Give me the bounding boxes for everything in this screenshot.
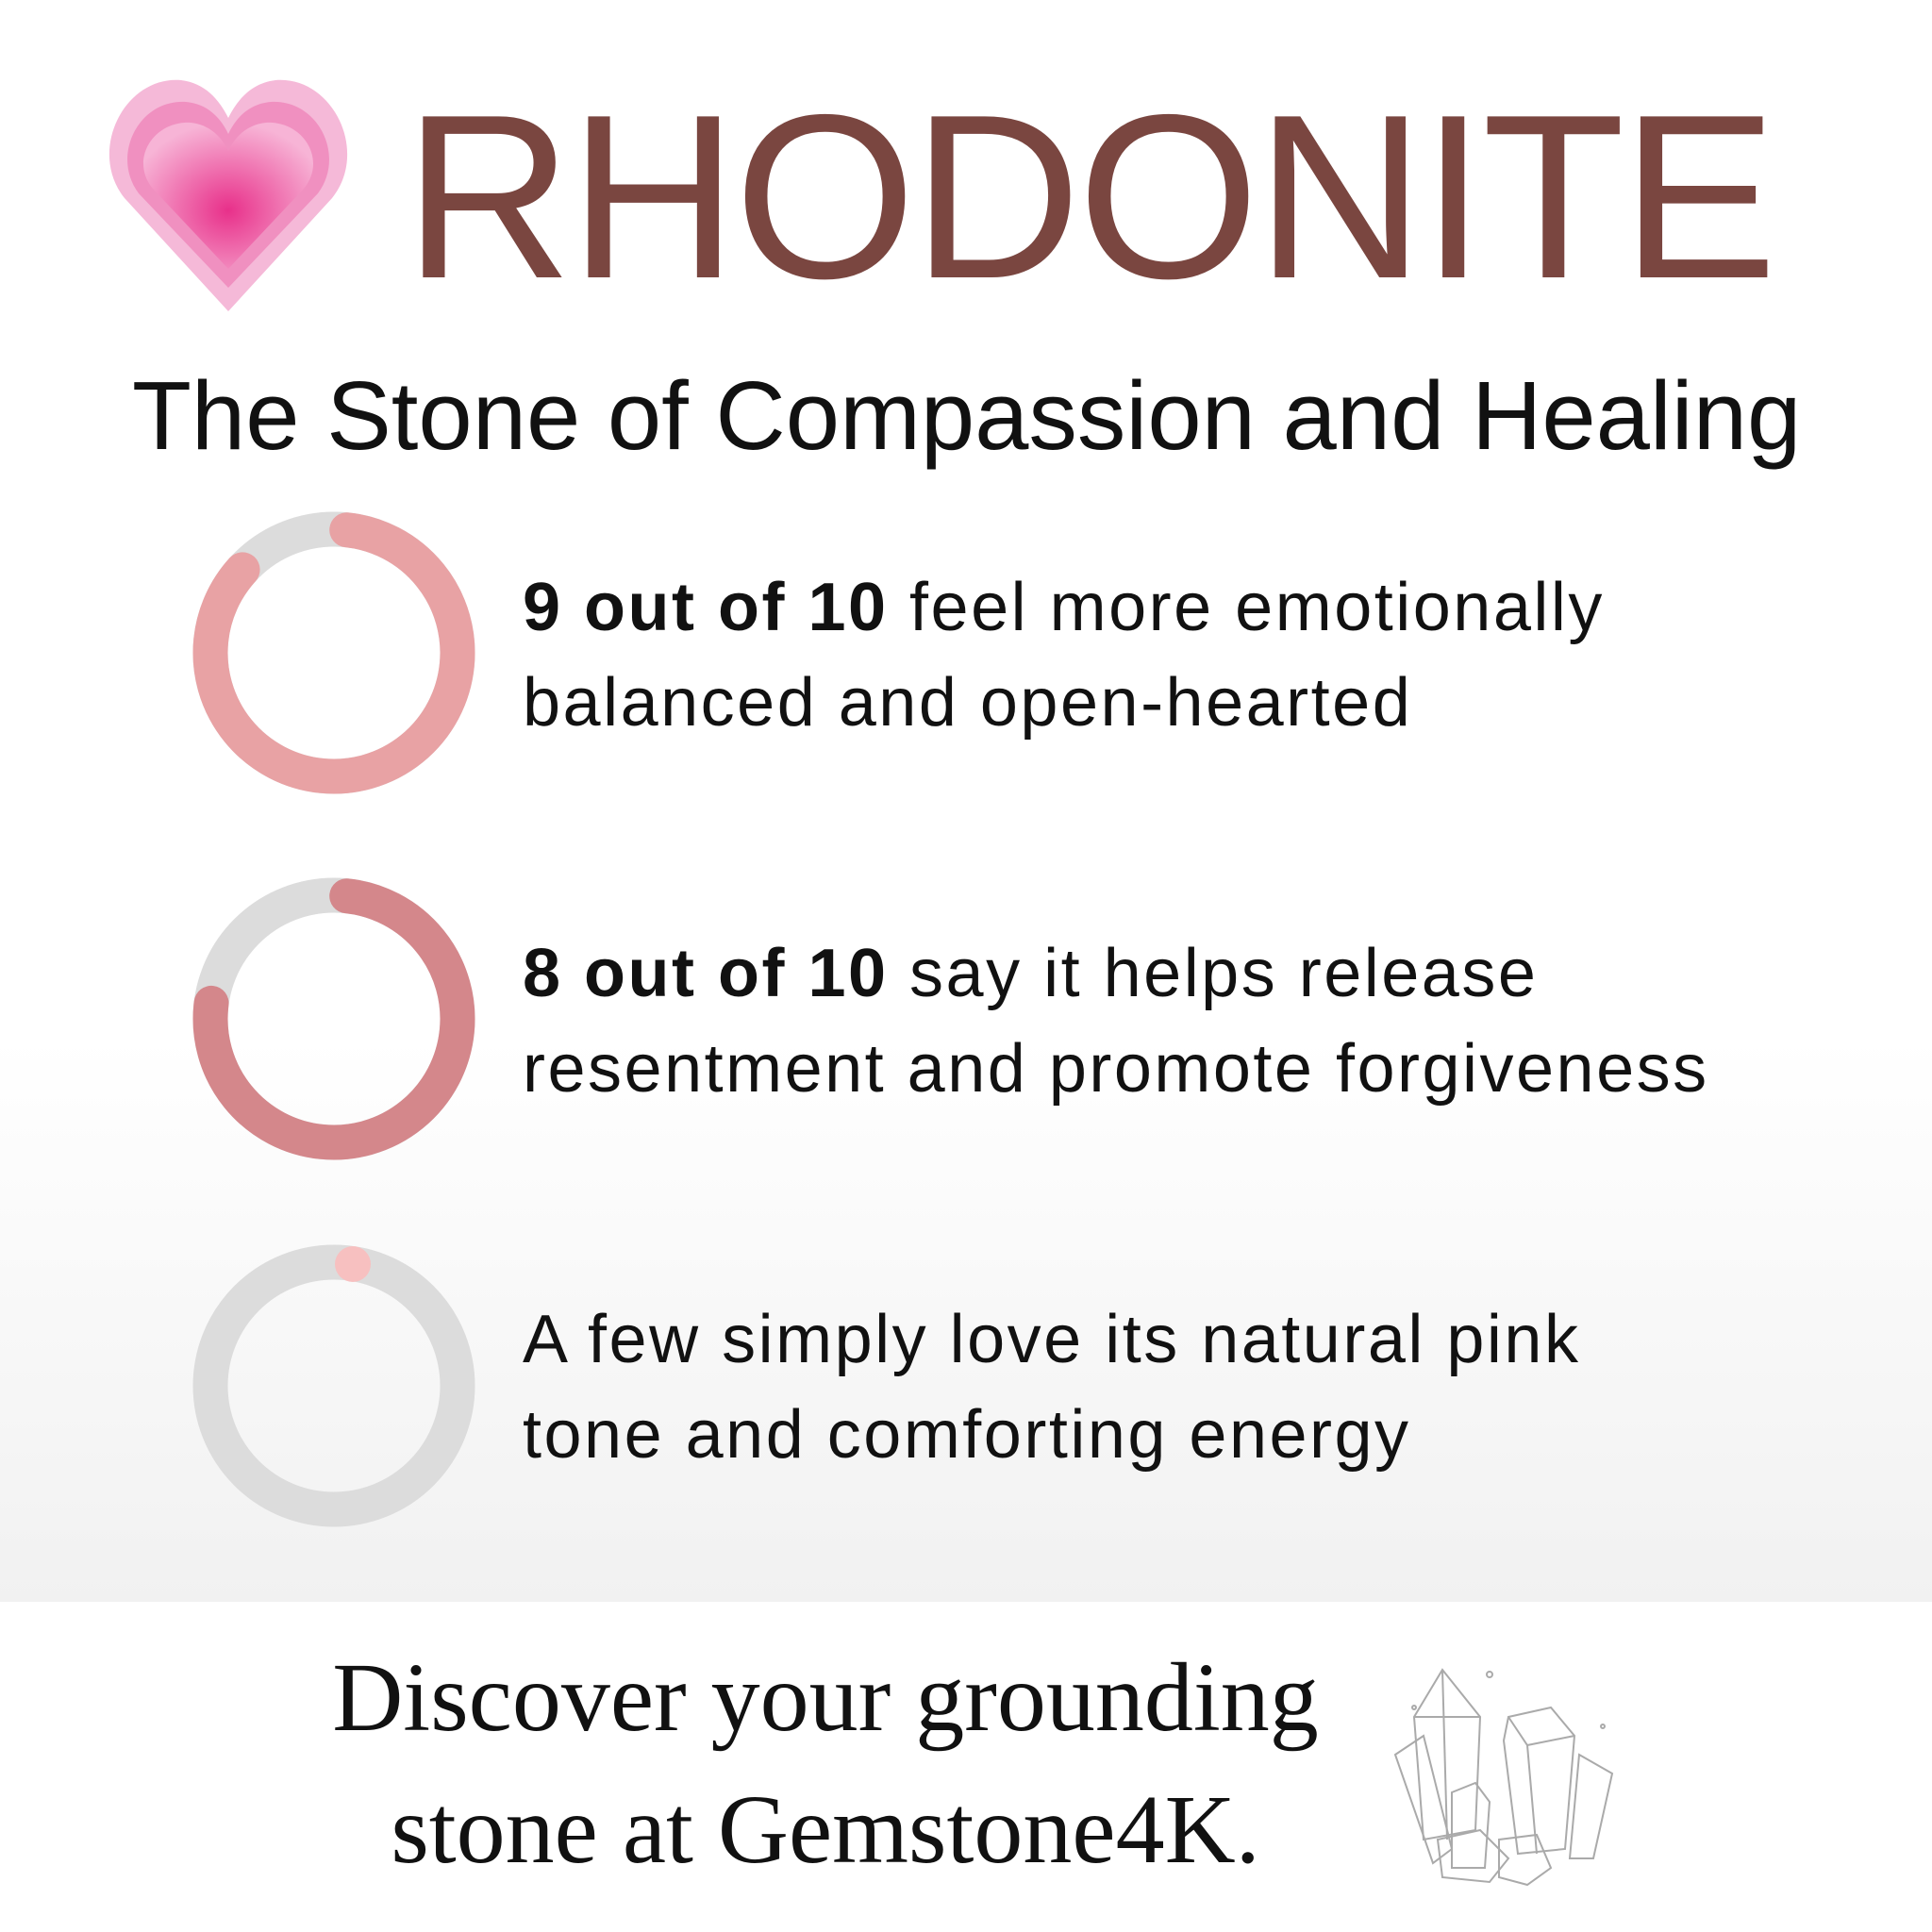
stat text 3: tone and comforting energy bbox=[523, 1397, 1411, 1473]
ring chart: few bbox=[192, 1245, 475, 1526]
stat text 2 bbox=[523, 936, 1709, 1107]
stat text 1 bbox=[523, 570, 1605, 741]
stat text 1: 9 out of 10 feel more emotionally bbox=[523, 570, 1605, 645]
ring chart: 90% bbox=[192, 511, 475, 794]
ring chart: 80% bbox=[192, 877, 475, 1160]
footer text bbox=[332, 1643, 1319, 1884]
icon: heart bbox=[109, 79, 347, 311]
subtitle: The Stone of Compassion and Healing bbox=[132, 361, 1801, 470]
stat text 1: balanced and open-hearted bbox=[523, 665, 1412, 741]
footer text: Discover your grounding bbox=[332, 1643, 1319, 1752]
icon: crystals bbox=[1394, 1668, 1613, 1887]
stat text 3 bbox=[523, 1302, 1580, 1473]
title: RHODONITE bbox=[404, 65, 1774, 327]
stat text 2: resentment and promote forgiveness bbox=[523, 1031, 1709, 1107]
footer text: stone at Gemstone4K. bbox=[391, 1775, 1260, 1884]
stat text 2: 8 out of 10 say it helps release bbox=[523, 936, 1538, 1011]
stat text 3: A few simply love its natural pink bbox=[523, 1302, 1580, 1377]
